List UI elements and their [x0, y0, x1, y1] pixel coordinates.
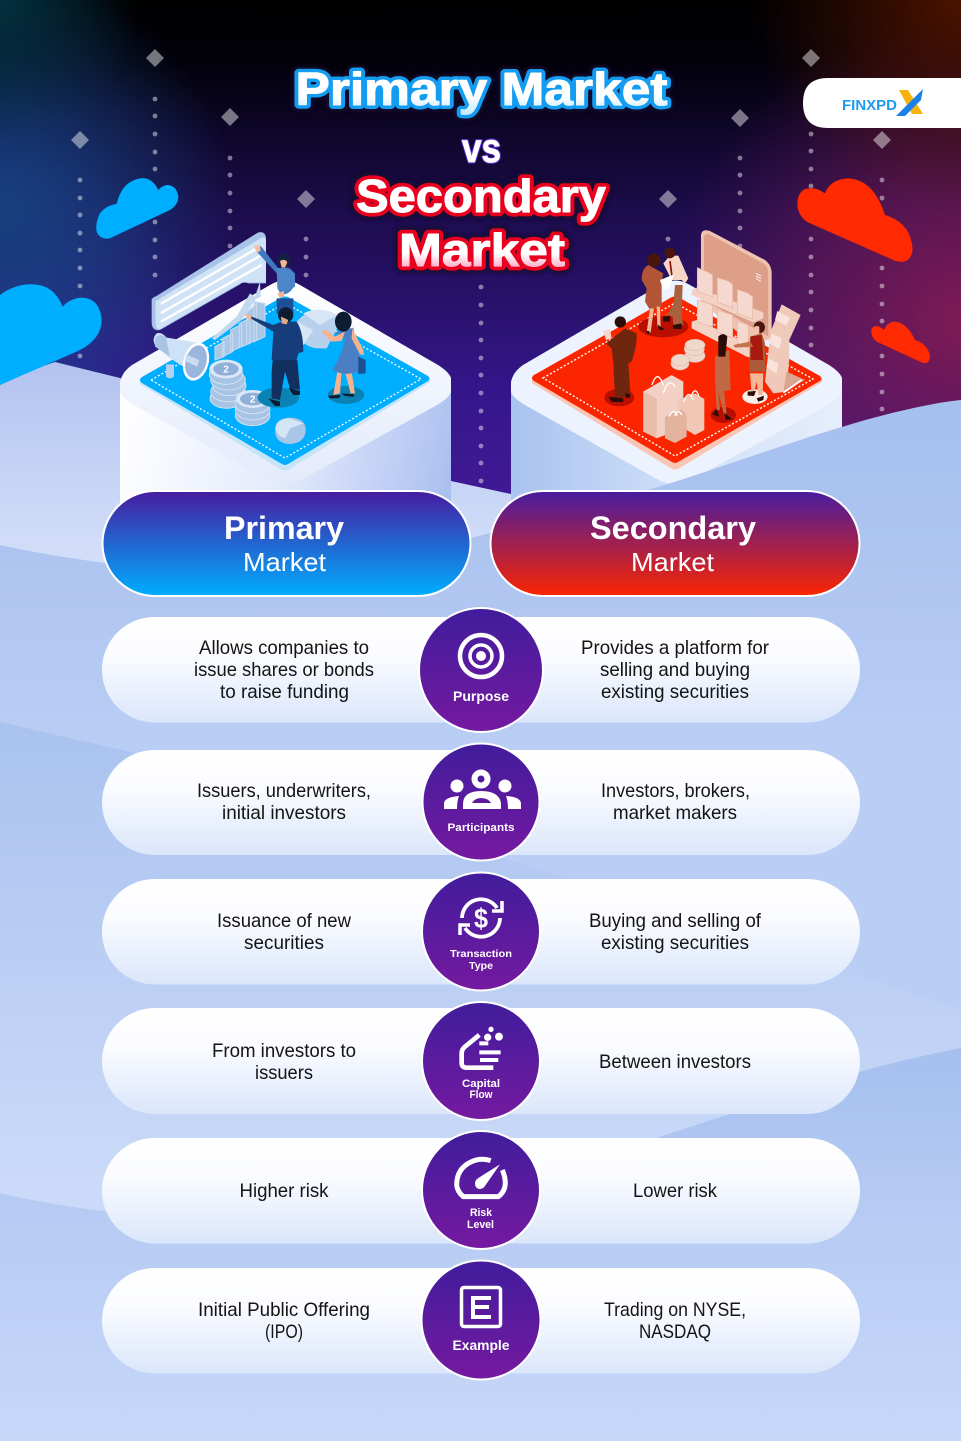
title line: Primary Market: Primary Market: [296, 63, 668, 115]
secondary participants text: Investors, brokers,: [601, 780, 750, 802]
secondary transaction text: Buying and selling of: [589, 910, 762, 932]
title line: Market: Market: [399, 224, 565, 276]
title line: Market: Market: [399, 224, 565, 276]
back landscape hill: [0, 362, 961, 1441]
badge: Transaction Type: [422, 872, 540, 990]
logo badge: [803, 78, 961, 128]
badge: Purpose: Purpose: [453, 688, 509, 704]
decorative diamonds and dotted lines: [71, 49, 891, 483]
badge: Participants: Participants: [448, 822, 514, 834]
primary purpose text: issue shares or bonds: [194, 659, 374, 681]
title line: Secondary: Secondary: [356, 170, 606, 222]
primary transaction text: Issuance of new: [217, 910, 352, 932]
secondary example text: NASDAQ: [639, 1321, 711, 1343]
primary capital flow text: issuers: [255, 1062, 313, 1084]
secondary transaction text: [589, 910, 762, 954]
secondary purpose text: selling and buying: [600, 659, 750, 681]
secondary purpose text: Provides a platform for: [581, 637, 769, 659]
primary risk text: Higher risk: [240, 1180, 329, 1202]
title line: vs: vs: [462, 125, 501, 171]
primary purpose text: to raise funding: [220, 681, 349, 703]
secondary transaction text: existing securities: [601, 932, 749, 954]
row: Participants: [102, 744, 860, 860]
badge: Risk Level: Risk: [470, 1207, 493, 1219]
secondary participants text: [601, 780, 750, 824]
row: Risk Level: [102, 1131, 860, 1249]
badge: Transaction Type: Transaction: [450, 948, 512, 960]
title: [296, 63, 668, 276]
title line: Primary Market: Primary Market: [296, 63, 668, 115]
title line: Secondary: Secondary: [356, 170, 606, 222]
primary participants text: Issuers, underwriters,: [197, 780, 371, 802]
primary capital flow text: [212, 1040, 356, 1084]
badge: Transaction Type: Type: [469, 960, 493, 972]
foreground hills over platforms: [0, 400, 961, 1441]
badge: Risk Level: [422, 1131, 540, 1249]
primary example text: (IPO): [265, 1321, 303, 1343]
badge: Capital Flow: [422, 1002, 540, 1120]
column header: Primary Market: Market: [243, 547, 327, 577]
row: Capital Flow: [102, 1002, 860, 1120]
secondary purpose text: [581, 637, 769, 703]
primary transaction text: securities: [244, 932, 324, 954]
blue mat: [140, 296, 430, 470]
primary purpose text: Allows companies to: [199, 637, 369, 659]
column header: Secondary Market: Market: [631, 547, 715, 577]
secondary example text: Trading on NYSE,: [604, 1299, 746, 1321]
illustration: people, chart, megaphone and coins: [152, 232, 366, 444]
title line: vs: vs: [462, 125, 501, 171]
clouds: [0, 178, 930, 385]
primary example text: Initial Public Offering: [198, 1299, 370, 1321]
red mat: [532, 296, 822, 470]
title line: Primary Market: Primary Market: [296, 63, 668, 115]
column header: Secondary Market: Secondary: [590, 510, 756, 546]
row: Purpose: [102, 608, 860, 732]
isometric platform: primary market: [120, 232, 451, 510]
badge: Example: Example: [452, 1337, 510, 1353]
illustration: people, chart, megaphone and coins: 2: [223, 365, 229, 376]
row: Example: [102, 1260, 860, 1380]
row: Transaction Type: [102, 872, 860, 990]
background sky: [0, 0, 961, 520]
secondary purpose text: existing securities: [601, 681, 749, 703]
secondary participants text: market makers: [613, 802, 737, 824]
primary participants text: initial investors: [222, 802, 346, 824]
illustration: people, chart, megaphone and coins: 2: [250, 395, 256, 406]
title line: Secondary: Secondary: [356, 170, 606, 222]
illustration: shoppers, shelf, bags and coins: [603, 230, 805, 443]
isometric platform: secondary market: [511, 230, 842, 510]
column header: Primary Market: [102, 491, 470, 596]
badge: Capital Flow: Flow: [470, 1089, 493, 1101]
badge: Example: [422, 1260, 540, 1380]
badge: Purpose: [419, 608, 543, 732]
secondary risk text: Lower risk: [633, 1180, 717, 1202]
primary transaction text: [217, 910, 352, 954]
primary participants text: [197, 780, 371, 824]
badge: Risk Level: Level: [467, 1219, 494, 1231]
primary example text: [198, 1299, 370, 1343]
primary purpose text: [194, 637, 374, 703]
secondary capital flow text: Between investors: [599, 1051, 751, 1073]
badge: Capital Flow: Capital: [462, 1078, 500, 1090]
secondary example text: [604, 1299, 746, 1343]
logo badge: FINXPD: [842, 98, 897, 114]
column header: Primary Market: Primary: [224, 510, 344, 546]
badge: Participants: [422, 744, 540, 860]
title line: Market: Market: [399, 224, 565, 276]
primary capital flow text: From investors to: [212, 1040, 356, 1062]
badge: Transaction Type: $: [474, 903, 488, 934]
column header: Secondary Market: [490, 491, 860, 596]
